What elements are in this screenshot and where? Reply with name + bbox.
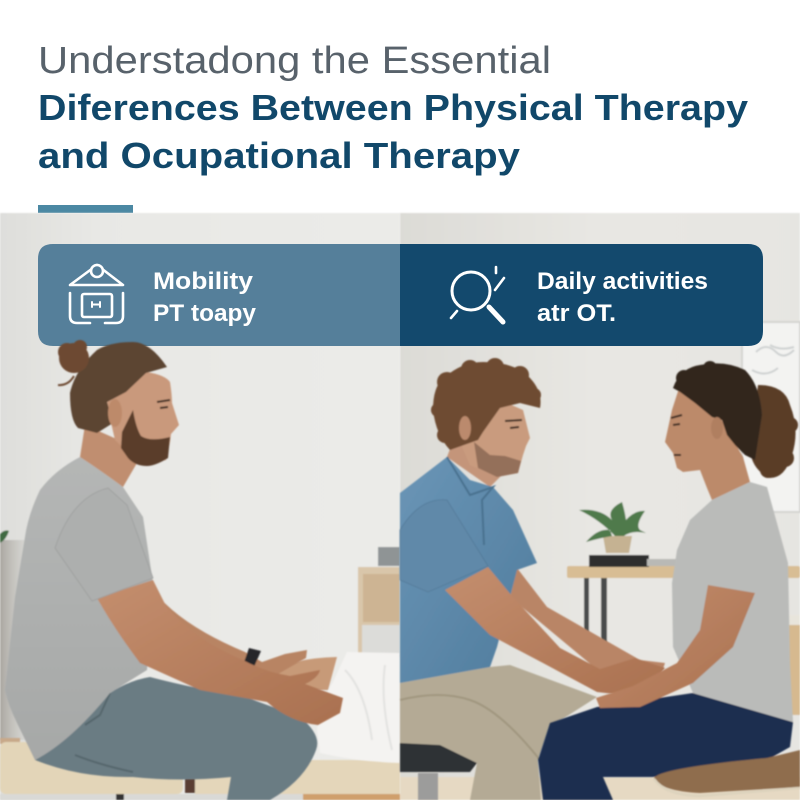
label: Daily activities atr OT.: Daily activities [537, 268, 708, 295]
therapist left: man with bun [5, 340, 343, 800]
photo background: left treatment room [0, 213, 400, 800]
navy trousers [538, 693, 793, 800]
hair bun [58, 340, 89, 373]
khaki trousers [400, 665, 597, 800]
whiteboard [742, 322, 800, 512]
icon: magnifying glass [451, 267, 504, 322]
stubble beard [474, 442, 521, 477]
treatment table [0, 738, 400, 800]
polo sleeve [400, 500, 488, 592]
neck [447, 430, 505, 487]
curly hair [431, 358, 541, 450]
white clothing [317, 652, 400, 763]
watch [243, 648, 261, 667]
accent bar [38, 205, 133, 213]
stool [400, 743, 477, 800]
eye and brow [505, 420, 522, 428]
arm and hands [596, 585, 755, 708]
wooden cabinet [358, 567, 400, 657]
near arm and hand [445, 567, 665, 697]
photo background: right treatment room [400, 213, 800, 800]
curly ponytail [750, 385, 798, 478]
ear [108, 399, 122, 427]
banner: Mobility PT [38, 244, 400, 346]
t-shirt [5, 457, 153, 760]
wooden stool [654, 750, 800, 796]
far arm [510, 568, 665, 678]
title: and Ocupational Therapy [38, 135, 520, 176]
front arm and hand [97, 580, 343, 725]
neck [80, 425, 137, 487]
beard [121, 410, 170, 466]
grey box on cabinet [378, 547, 400, 566]
ear [711, 417, 723, 439]
head skin [107, 372, 179, 464]
eye and brow [157, 400, 170, 408]
head skin [455, 400, 530, 477]
black box and papers on desk [589, 555, 677, 567]
label: Mobility PT toapy: Mobility [153, 268, 254, 295]
t-shirt sleeve [55, 488, 153, 601]
hair [673, 361, 762, 460]
label: Daily activities atr OT. [537, 268, 708, 327]
ear [459, 416, 471, 440]
icon: clinic house [70, 265, 123, 323]
banner: Daily activities OT [400, 244, 763, 346]
patient belly [262, 657, 337, 690]
client right: woman seated [538, 361, 800, 800]
label: Daily activities atr OT.: atr OT. [537, 300, 616, 327]
wooden desk [567, 566, 800, 643]
eye, brow and mouth [671, 415, 682, 455]
label: Mobility PT toapy: PT toapy [153, 300, 257, 327]
floor and wood base [400, 777, 800, 800]
t-shirt [672, 482, 793, 722]
potted plant [579, 502, 646, 553]
therapist right: man in blue polo [400, 358, 665, 800]
patient lying on table [262, 652, 400, 763]
polo shirt [400, 457, 537, 683]
back arm [153, 590, 307, 680]
title: Diferences Between Physical Therapy [38, 87, 748, 128]
hair [70, 342, 167, 433]
neck and face [665, 385, 750, 500]
plant leaf at left edge [0, 530, 9, 543]
right wooden cabinet [788, 615, 800, 715]
title [38, 40, 748, 176]
trousers [35, 677, 317, 800]
label: Mobility PT toapy [153, 268, 257, 327]
title: Understadong the Essential [38, 40, 551, 82]
